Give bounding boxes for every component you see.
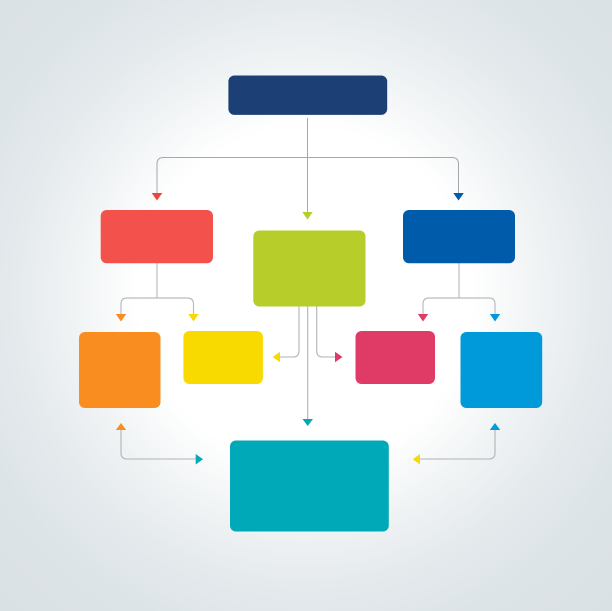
arrow: teal down: [302, 419, 313, 426]
arrow: yellow down: [188, 314, 199, 322]
arrow: yellow left bottom: [413, 454, 420, 464]
arrow: yellow left: [273, 352, 280, 362]
arrow: orange up: [116, 423, 126, 430]
arrow: sky blue down: [490, 314, 500, 322]
box: orange: [79, 332, 160, 408]
arrow: blue down: [453, 193, 464, 200]
arrow: orange down: [116, 314, 126, 322]
box: teal bottom: [230, 440, 389, 532]
box: red: [101, 210, 213, 263]
box: yellow: [183, 331, 263, 384]
box: blue: [403, 210, 515, 263]
box: lime centre: [253, 230, 366, 306]
arrow: pink right: [335, 352, 342, 362]
connector: blue box to pink and sky blue: [423, 263, 495, 314]
connector: red box to orange and yellow: [121, 263, 194, 314]
arrow: pink down: [418, 314, 428, 322]
connector: orange box to teal box: [121, 428, 198, 459]
arrow: teal right: [196, 454, 203, 464]
connector: top box to left, centre and right: [157, 118, 458, 214]
box: pink: [356, 331, 435, 384]
arrow: sky blue up: [490, 423, 500, 430]
arrow: red down: [152, 193, 162, 200]
connector: green box to yellow, pink and teal: [278, 306, 338, 419]
connector: sky blue box to teal box: [418, 428, 495, 459]
box: sky blue: [460, 332, 542, 408]
arrow: lime down: [302, 212, 313, 220]
box: navy top: [228, 76, 387, 115]
